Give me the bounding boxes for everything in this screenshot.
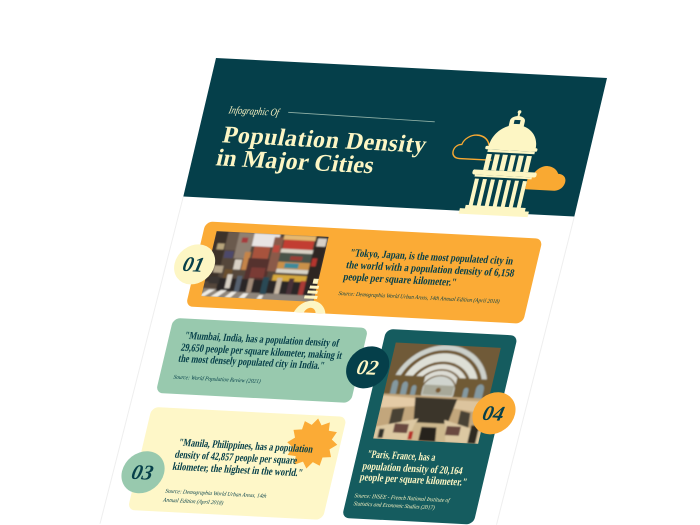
quote: Manila: "Manila, Philippines, has a population [177, 437, 314, 456]
panel: Paris [342, 329, 533, 525]
header band [183, 58, 607, 220]
badge: 04 [468, 391, 520, 435]
badge: 03 [117, 450, 169, 494]
icon: starburst [281, 417, 343, 470]
source: Paris: Statistics and Economic Studies (2017) [353, 500, 436, 511]
badge: 03: 03 [129, 460, 156, 485]
icon: filled cloud [525, 165, 569, 191]
badge: 02: 02 [354, 355, 381, 380]
photo: Paris museum hall [373, 342, 501, 444]
quote: Manila: kilometer, the highest in the world." [171, 461, 304, 479]
source: Tokyo: Source: Demographia World Urban Areas, 14th Annual Edition (April 2018) [338, 290, 500, 305]
quote: Paris: "Paris, France, has a [366, 449, 437, 464]
source: Mumbai: Source: World Population Review (2021) [173, 374, 261, 385]
quote: Paris: population density of 20,164 [361, 460, 464, 477]
quote: Paris: people per square kilometer." [359, 471, 468, 489]
quote: Mumbai: "Mumbai, India, has a population density of [183, 330, 341, 350]
source: Manila: Source: Demographia World Urban Areas, 14th [165, 488, 267, 500]
quote: Mumbai: the most densely populated city in India." [177, 353, 326, 372]
badge: 01: 01 [180, 252, 207, 277]
photo: Tokyo street [201, 231, 329, 302]
quote: Manila: density of 42,857 people per square [174, 449, 299, 467]
title: in Major Cities [214, 145, 377, 179]
badge: 02 [342, 345, 394, 389]
title: Population Density [220, 122, 429, 159]
quote: Tokyo: the world with a population density of 6,158 [345, 259, 516, 280]
icon: capitol building [459, 108, 552, 217]
eyebrow label: Infographic Of [227, 105, 282, 119]
panel: Mumbai [156, 318, 368, 403]
panel: Manila [113, 406, 347, 520]
quote: Tokyo: people per square kilometer." [342, 271, 458, 289]
source: Paris: Source: INSEE - French National Institute of [354, 492, 452, 504]
decoration: tower silhouette [294, 278, 326, 314]
panel: Tokyo [164, 220, 543, 325]
badge: 01 [170, 243, 219, 285]
quote: Mumbai: 29,650 people per square kilometer, making it [180, 342, 344, 362]
source: Manila: Annual Edition (April 2018) [162, 497, 224, 507]
icon: outline cloud [451, 134, 497, 160]
quote: Tokyo: "Tokyo, Japan, is the most populated city in [349, 247, 514, 267]
badge: 04: 04 [480, 401, 507, 426]
